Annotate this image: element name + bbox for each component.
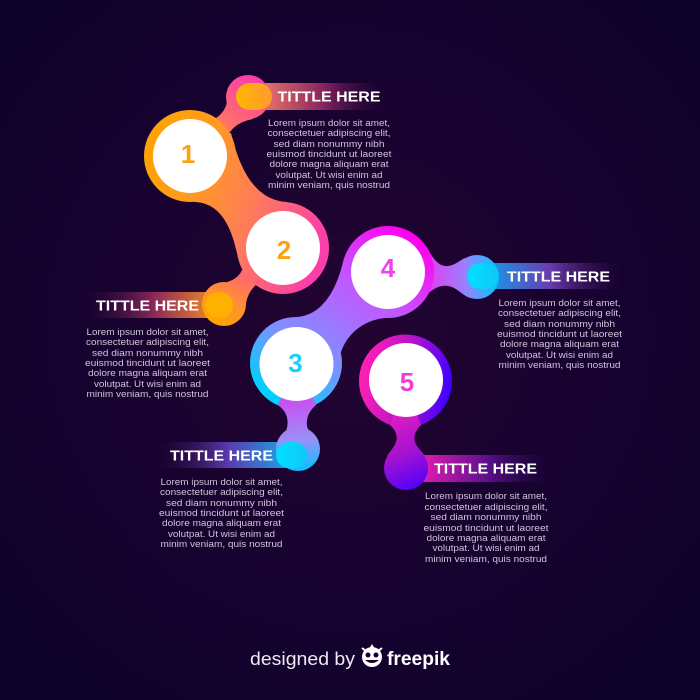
- node: right: [455, 255, 499, 299]
- text block 2: [85, 327, 211, 399]
- connector: step 5 to lower node: [387, 381, 425, 468]
- title bar 4: [485, 263, 622, 289]
- text block 1: Lorem ipsum dolor sit amet,: [268, 118, 390, 128]
- text block 1: minim veniam, quis nostrud: [268, 180, 390, 190]
- step 2 badge: [246, 211, 320, 285]
- text block 4: [497, 298, 623, 370]
- text block 2: euismod tincidunt ut laoreet: [85, 358, 211, 368]
- text block 5: [424, 491, 549, 564]
- connector: top node to step 1: [190, 97, 253, 156]
- connector: step 2 to lower node: [224, 248, 283, 304]
- pill: step 4 node: [467, 263, 498, 289]
- text block 5: volutpat. Ut wisi enim ad: [432, 543, 540, 553]
- connector: step 3 to lower node: [277, 363, 318, 449]
- text block 2: sed diam nonummy nibh: [92, 348, 203, 358]
- text block 2: minim veniam, quis nostrud: [86, 389, 208, 399]
- step 5 badge: [369, 343, 443, 417]
- text block 1: sed diam nonummy nibh: [274, 139, 384, 149]
- credit text: designed by: [250, 649, 355, 669]
- text block 4: sed diam nonummy nibh: [504, 319, 615, 329]
- text block 5: Lorem ipsum dolor sit amet,: [425, 491, 547, 501]
- pill: step 2 node: [205, 292, 233, 318]
- link body between steps 1 and 2: [190, 133, 287, 258]
- text block 5: consectetuer adipiscing elit,: [424, 502, 548, 512]
- text block 4: euismod tincidunt ut laoreet: [497, 329, 623, 339]
- title bar 2: [84, 292, 224, 318]
- text block 5: dolore magna aliquam erat: [426, 533, 546, 543]
- step 1 badge: [153, 119, 227, 193]
- text block 4: volutpat. Ut wisi enim ad: [506, 350, 613, 360]
- node: lower: [384, 446, 428, 490]
- title bar 5: [420, 455, 548, 482]
- step 3 badge: 3: [288, 348, 303, 378]
- text block 1: euismod tincidunt ut laoreet: [266, 149, 392, 159]
- text block 3: dolore magna aliquam erat: [162, 518, 282, 528]
- text block 1: volutpat. Ut wisi enim ad: [276, 170, 382, 180]
- title 1: TITTLE HERE: [278, 88, 380, 106]
- text block 2: dolore magna aliquam erat: [88, 368, 208, 378]
- text block 5: euismod tincidunt ut laoreet: [424, 523, 549, 533]
- text block 2: Lorem ipsum dolor sit amet,: [86, 327, 208, 337]
- title 2: TITTLE HERE: [96, 298, 199, 314]
- connected shape: step 5: [359, 334, 452, 490]
- title 4: TITTLE HERE: [507, 268, 610, 286]
- text block 3: volutpat. Ut wisi enim ad: [168, 529, 275, 539]
- text block 4: consectetuer adipiscing elit,: [498, 308, 621, 318]
- ring: step 2: [237, 202, 329, 294]
- connected shape: steps 1 and 2: [144, 75, 329, 326]
- title bar 3: [158, 442, 298, 468]
- text block 4: dolore magna aliquam erat: [500, 339, 620, 349]
- text block 3: [159, 477, 285, 549]
- step 4 badge: [351, 235, 425, 309]
- pill: step 1 node: [236, 83, 272, 110]
- text block 2: consectetuer adipiscing elit,: [86, 337, 209, 347]
- text block 3: Lorem ipsum dolor sit amet,: [160, 477, 282, 487]
- link body between steps 3 and 4: [296, 258, 388, 363]
- title 3: TITTLE HERE: [170, 448, 273, 464]
- text block 5: sed diam nonummy nibh: [430, 512, 542, 522]
- text block 5: minim veniam, quis nostrud: [425, 554, 547, 564]
- text block 2: volutpat. Ut wisi enim ad: [94, 379, 201, 389]
- step 4 badge: 4: [381, 253, 396, 283]
- icon: freepik mascot: [362, 644, 382, 667]
- title bar 1: [250, 83, 382, 110]
- text block 1: dolore magna aliquam erat: [270, 159, 389, 169]
- text block 3: sed diam nonummy nibh: [166, 498, 277, 508]
- step 1 badge: 1: [181, 139, 195, 169]
- step 2 badge: 2: [277, 235, 291, 265]
- freepik wordmark: freepik: [387, 649, 450, 670]
- connected shape: steps 3 and 4: [250, 226, 499, 471]
- pill: step 3 node: [276, 442, 307, 468]
- text block 3: euismod tincidunt ut laoreet: [159, 508, 285, 518]
- node: top: [226, 75, 270, 119]
- text block 1: [266, 118, 392, 190]
- text block 1: consectetuer adipiscing elit,: [268, 128, 390, 138]
- text block 3: consectetuer adipiscing elit,: [160, 487, 283, 497]
- ring: step 5: [359, 334, 452, 428]
- text block 4: Lorem ipsum dolor sit amet,: [498, 298, 620, 308]
- text block 4: minim veniam, quis nostrud: [498, 360, 620, 370]
- title 5: TITTLE HERE: [434, 460, 537, 478]
- ring: step 3: [250, 317, 342, 409]
- text block 3: minim veniam, quis nostrud: [160, 539, 282, 549]
- step 5 badge: 5: [400, 367, 414, 397]
- node: lower: [202, 282, 246, 326]
- connector: step 4 to right node: [388, 247, 477, 297]
- ring: step 4: [342, 226, 434, 318]
- ring: step 1: [144, 110, 236, 202]
- node: lower: [276, 427, 320, 471]
- step 3 badge: [260, 327, 334, 401]
- footer credit: [250, 644, 450, 670]
